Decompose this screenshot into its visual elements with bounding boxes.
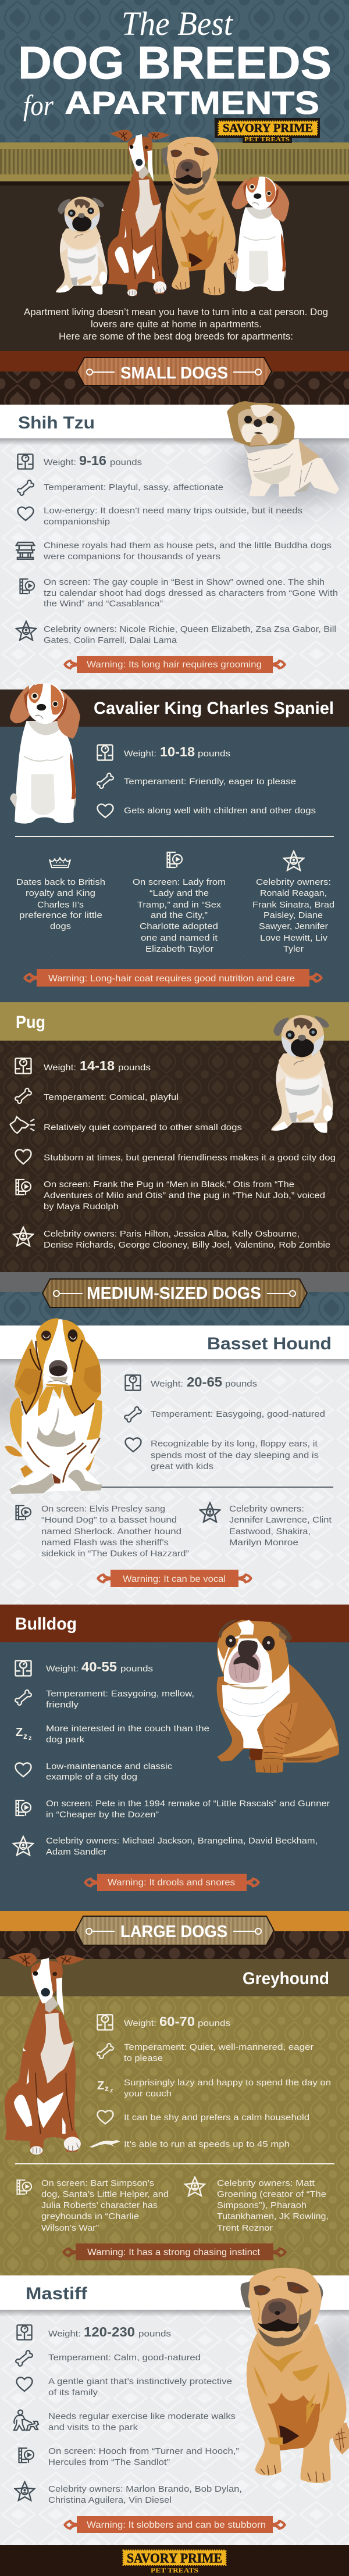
column: celebrity owners (200, 1503, 332, 1548)
icon: sleeping Zzz: z (29, 1735, 32, 1742)
row: temperament: friendly (46, 1700, 79, 1710)
panel: Mastiff (0, 2268, 349, 2545)
row: on screen: On screen: Hooch from “Turner and Hooch,” (48, 2446, 239, 2456)
row: weight (125, 1374, 257, 1391)
row: couch: dog park (46, 1735, 85, 1745)
intro text: Apartment living doesn’t mean you have to turn into a cat person. Dog (24, 307, 328, 317)
panel: Shih Tzu (0, 401, 349, 689)
row: low energy: companionship (44, 517, 110, 527)
row: temperament (124, 1406, 325, 1423)
row: weight (15, 1058, 151, 1074)
hero floor panel (0, 185, 349, 351)
panel: Basset Hound (0, 1318, 349, 1605)
row: weight (17, 2324, 171, 2340)
column: on screen: On screen: Lady from (133, 877, 226, 887)
row: celebrity owners: Denise Richards, George Clooney, Billy Joel, Valentino, Rob Zombie (44, 1240, 330, 1250)
row: celebrity owners (13, 1227, 330, 1250)
row: weight: Weight: (48, 2329, 81, 2339)
row: weight: pounds (118, 1063, 151, 1073)
row: temperament (97, 773, 296, 789)
intro text (24, 307, 328, 342)
column: celebrity owners: Paisley, Diane (263, 910, 323, 920)
row: weight: pounds (120, 1664, 153, 1674)
row: temperament: Temperament: Quiet, well-mannered, eager (124, 2042, 314, 2052)
column: on screen (133, 852, 226, 954)
icon: sleeping Zzz: z (23, 1731, 27, 1741)
row: recognizable: spends most of the day sleeping and is (151, 1450, 319, 1460)
row: gentle giant: of its family (48, 2388, 98, 2398)
column: celebrity owners: Simpsons”), Pharaoh (217, 2200, 307, 2210)
row: on screen (19, 2446, 239, 2467)
row: recognizable (126, 1438, 319, 1471)
column: celebrity owners: Groening (creator of “The (217, 2189, 326, 2199)
row: shy: It can be shy and prefers a calm household (124, 2113, 309, 2123)
row: temperament: Temperament: Calm, good-natured (48, 2353, 201, 2363)
row: on screen: by Maya Rudolph (44, 1202, 119, 1212)
title: APARTMENTS (65, 84, 319, 121)
row: lazy: Surprisingly lazy and happy to spend the day on (124, 2078, 331, 2088)
row: temperament: Temperament: Friendly, eager to please (124, 777, 296, 787)
dog: cavalier (232, 177, 289, 291)
column: celebrity owners: Frank Sinatra, Brad (252, 900, 334, 910)
row: weight (15, 1659, 153, 1676)
column: on screen: named Flash was the sheriff's (41, 1538, 169, 1548)
row: temperament: Temperament: Easygoing, good-natured (151, 1409, 325, 1419)
row: exercise (14, 2410, 236, 2432)
heading: Greyhound: Greyhound (243, 1969, 329, 1988)
row: Chinese royals: Chinese royals had them as house pets, and the little Buddha dogs (44, 541, 332, 551)
row: gets along: Gets along well with children and other dogs (124, 806, 316, 816)
row: lazy (97, 2078, 331, 2099)
column: royalty: Charles II’s (37, 900, 84, 910)
footer panel with logo: PET TREATS (151, 2567, 198, 2574)
row: weight: 120-230 (84, 2324, 135, 2339)
row: speed: It’s able to run at speeds up to 45 mph (124, 2139, 290, 2149)
dog: bulldog (217, 1619, 339, 1773)
warning: grooming: Warning: Its long hair requires grooming (87, 660, 262, 670)
footer panel with logo (0, 2545, 349, 2576)
row: weight: 14-18 (80, 1058, 115, 1073)
row: temperament (15, 1088, 179, 1104)
column: on screen: “Lady and the (149, 888, 209, 898)
band: small dogs ribbon: SMALL DOGS (120, 364, 228, 383)
dog: pug (271, 1015, 333, 1133)
column: celebrity owners: Ronald Reagan, (260, 888, 327, 898)
column: royalty (16, 858, 105, 931)
column: celebrity owners: Celebrity owners: Matt (217, 2178, 315, 2188)
row: celebrity owners (15, 2482, 242, 2505)
row: weight: 10-18 (160, 744, 195, 759)
row: weight: pounds (138, 2329, 171, 2339)
icon: sleeping Zzz: z (105, 2084, 109, 2093)
row: quiet: Relatively quiet compared to other small dogs (44, 1123, 242, 1132)
dog: shih tzu (227, 401, 339, 496)
row: low maintenance: Low-maintenance and classic (46, 1762, 173, 1771)
row: weight: pounds (225, 1379, 257, 1389)
row: on screen (16, 1799, 330, 1820)
column: on screen: Tramp,” and in “Sex (137, 900, 222, 910)
column: celebrity owners: Celebrity owners: (229, 1504, 304, 1514)
row: weight: Weight: (44, 458, 76, 467)
band: small dogs ribbon (0, 351, 349, 405)
column: royalty: Dates back to British (16, 877, 105, 887)
row: weight: Weight: (44, 1063, 76, 1073)
panel: Pug (0, 1002, 349, 1272)
row: shy (98, 2110, 309, 2124)
row: temperament: to please (124, 2053, 163, 2063)
row: low maintenance: example of a city dog (46, 1772, 137, 1782)
row: weight: 40-55 (81, 1659, 117, 1674)
column: on screen: Elizabeth Taylor (145, 944, 213, 954)
column: on screen (16, 1504, 189, 1559)
warning: coat (23, 969, 323, 987)
logo: Savory Prime: SAVORY PRIME (223, 121, 313, 135)
row: weight: 9-16 (79, 453, 106, 468)
row: lazy: your couch (124, 2089, 172, 2099)
column: celebrity owners: Tyler (283, 944, 304, 954)
column: on screen (17, 2178, 169, 2233)
warning: chasing: Warning: It has a strong chasing instinct (87, 2248, 261, 2257)
heading: Bulldog: Bulldog (15, 1614, 77, 1634)
icon: sleeping Zzz: Z (16, 1726, 23, 1739)
dog: mastiff (162, 137, 239, 295)
row: recognizable: great with kids (151, 1462, 213, 1471)
row: weight: 60-70 (159, 2014, 195, 2029)
row: weight: Weight: (124, 2018, 156, 2028)
row: temperament: Temperament: Easygoing, mellow, (46, 1689, 194, 1699)
row: celebrity owners: Christina Aguilera, Vin Diesel (48, 2495, 172, 2505)
warning: drools (84, 1874, 260, 1891)
row: weight: Weight: (46, 1664, 79, 1674)
band: medium-sized dogs ribbon (0, 1272, 349, 1325)
row: low energy (17, 506, 302, 527)
row: weight: Weight: (124, 749, 156, 759)
icon: sleeping Zzz: Z (97, 2080, 104, 2092)
column: on screen: “Hound Dog” to a basset hound (41, 1515, 177, 1525)
icon: sleeping Zzz (16, 1726, 32, 1742)
row: couch: More interested in the couch than the (46, 1724, 209, 1734)
hero dogs group (56, 130, 289, 296)
panel: Greyhound (0, 1953, 349, 2275)
icon: sleeping Zzz (97, 2080, 113, 2094)
row: celebrity owners: Celebrity owners: Paris Hilton, Jessica Alba, Kelly Osbourne, (44, 1229, 300, 1239)
column: celebrity owners: Marilyn Monroe (229, 1538, 298, 1548)
band: medium-sized dogs ribbon: MEDIUM-SIZED DOGS (87, 1284, 261, 1303)
column: on screen: On screen: Elvis Presley sang (41, 1504, 165, 1514)
row: exercise: and visits to the park (48, 2423, 138, 2432)
column: celebrity owners (185, 2177, 329, 2233)
dog: basset hound (5, 1318, 102, 1494)
warning: chasing (62, 2243, 287, 2260)
row: weight: pounds (110, 458, 142, 467)
title: for (23, 89, 54, 122)
row: on screen: Hercules from “The Sandlot” (48, 2457, 170, 2467)
column: celebrity owners: Jennifer Lawrence, Clint (229, 1515, 332, 1525)
warning: vocal (97, 1570, 252, 1587)
heading: Mastiff: Mastiff (26, 2284, 88, 2303)
column: on screen: greyhounds in “Charlie (41, 2211, 139, 2221)
panel: Bulldog (0, 1605, 349, 1911)
title: The Best (122, 5, 234, 42)
column: on screen: Charlotte adopted (140, 921, 218, 931)
column: on screen: On screen: Bart Simpson’s (41, 2178, 154, 2188)
row: on screen: in “Cheaper by the Dozen” (46, 1810, 159, 1820)
row: celebrity owners: Celebrity owners: Nicole Richie, Queen Elizabeth, Zsa Zsa Gabor, Bill (44, 624, 336, 634)
column: celebrity owners (252, 851, 334, 954)
row: gentle giant (16, 2377, 232, 2398)
row: on screen: On screen: Pete in the 1994 remake of “Little Rascals” and Gunner (46, 1799, 330, 1809)
dog: greyhound (108, 130, 170, 296)
column: celebrity owners: Tutankhamen, JK Rowling, (217, 2211, 329, 2221)
row: temperament (97, 2042, 314, 2063)
row: on screen (16, 1180, 325, 1212)
warning: coat: Warning: Long-hair coat requires good nutrition and care (48, 974, 295, 984)
column: royalty: preference for little (19, 910, 102, 920)
column: on screen: dog, Santa’s Little Helper, and (41, 2189, 169, 2199)
column: celebrity owners: Love Hewitt, Liv (260, 933, 328, 943)
heading: Basset Hound: Basset Hound (207, 1334, 332, 1353)
column: on screen: sidekick in “The Dukes of Hazzard” (41, 1549, 189, 1559)
row: weight (97, 744, 230, 760)
dog: cavalier (10, 684, 80, 824)
icon: sleeping Zzz: z (110, 2087, 113, 2094)
heading: Shih Tzu: Shih Tzu (18, 413, 95, 433)
dog: pug (56, 196, 108, 294)
logo: Savory Prime: PET TREATS (244, 137, 290, 143)
logo: Savory Prime (215, 118, 320, 143)
row: temperament: Temperament: Comical, playful (44, 1092, 179, 1102)
row: gets along (98, 804, 316, 817)
dog: greyhound (5, 1953, 86, 2155)
row: celebrity owners: Gates, Colin Farrell, Dalai Lama (44, 635, 177, 645)
row: Chinese royals (16, 541, 332, 562)
title: DOG BREEDS (18, 37, 332, 88)
row: celebrity owners: Celebrity owners: Michael Jackson, Brangelina, David Beckham, (46, 1836, 318, 1846)
row: weight (97, 2014, 230, 2030)
row: celebrity owners: Celebrity owners: Marlon Brando, Bob Dylan, (48, 2484, 242, 2494)
row: temperament (15, 1689, 194, 1710)
row: quiet (10, 1117, 242, 1133)
column: on screen: Wilson’s War” (41, 2223, 99, 2233)
row: Chinese royals: were companions for thousands of years (43, 552, 220, 562)
title (18, 5, 332, 122)
row: stubborn: Stubborn at times, but general friendliness makes it a good city dog (44, 1153, 336, 1163)
column: celebrity owners: Eastwood, Shakira, (229, 1527, 311, 1537)
header wallpaper panel (0, 0, 349, 142)
row: on screen: Adventures of Milo and Otis” and the pug in “The Nut Job,” voiced (44, 1191, 325, 1201)
panel: Cavalier King Charles Spaniel (0, 684, 349, 1002)
row: celebrity owners: Adam Sandler (46, 1847, 106, 1857)
row: weight: pounds (198, 749, 230, 759)
row: on screen (20, 577, 338, 609)
row: weight: pounds (198, 2018, 230, 2028)
row: weight (17, 453, 142, 469)
row: temperament (17, 480, 223, 496)
row: on screen: the Wind” and “Casablanca” (44, 599, 163, 609)
warning: slobbers (63, 2516, 286, 2533)
row: low energy: Low-energy: It doesn't need many trips outside, but it needs (44, 506, 302, 516)
column: royalty: royalty and King (26, 888, 95, 898)
row: gentle giant: A gentle giant that’s instinctively protective (48, 2377, 232, 2386)
row: weight: Weight: (151, 1379, 183, 1389)
footer panel with logo: SAVORY PRIME (127, 2551, 222, 2566)
row: on screen: On screen: The gay couple in “Best in Show” owned one. The shih (44, 577, 325, 587)
heading: Cavalier: Cavalier King Charles Spaniel (94, 699, 334, 718)
row: celebrity owners (13, 1836, 318, 1857)
row: exercise: Needs regular exercise like moderate walks (48, 2411, 236, 2421)
row: celebrity owners (16, 621, 336, 645)
dog: mastiff (241, 2268, 349, 2483)
column: royalty: dogs (50, 921, 71, 931)
column: on screen: and the City,” (151, 910, 208, 920)
row: on screen: tzu calendar shoot had dogs dressed as characters from “Gone With (44, 588, 338, 598)
warning: grooming (63, 656, 286, 673)
heading: Pug: Pug (16, 1013, 45, 1032)
column: celebrity owners: Sawyer, Jennifer (259, 921, 328, 931)
row: low maintenance (15, 1762, 173, 1782)
row: on screen: On screen: Frank the Pug in “Men in Black,” Otis from “The (44, 1180, 294, 1189)
row: couch (16, 1724, 209, 1745)
warning: slobbers: Warning: It slobbers and can be stubborn (87, 2520, 266, 2530)
warning: vocal: Warning: It can be vocal (123, 1574, 226, 1584)
band: large dogs ribbon (0, 1911, 349, 1959)
warning: drools: Warning: It drools and snores (108, 1878, 235, 1888)
wainscot rail (0, 142, 349, 185)
column: celebrity owners: Celebrity owners: (256, 877, 331, 887)
column: on screen: one and named it (141, 933, 218, 943)
row: stubborn (15, 1150, 336, 1164)
band: large dogs ribbon: LARGE DOGS (120, 1923, 227, 1941)
row: temperament: Temperament: Playful, sassy, affectionate (44, 483, 223, 492)
intro text: Here are some of the best dog breeds for apartments: (59, 331, 293, 342)
row: temperament (15, 2350, 201, 2367)
column: celebrity owners: Trent Reznor (217, 2223, 273, 2233)
row: recognizable: Recognizable by its long, floppy ears, it (151, 1439, 318, 1449)
column: on screen: Julia Roberts’ character has (41, 2200, 158, 2210)
column: on screen: named Sherlock. Another hound (41, 1527, 181, 1537)
intro text: lovers are quite at home in apartments. (91, 319, 262, 330)
row: weight: 20-65 (187, 1374, 222, 1389)
